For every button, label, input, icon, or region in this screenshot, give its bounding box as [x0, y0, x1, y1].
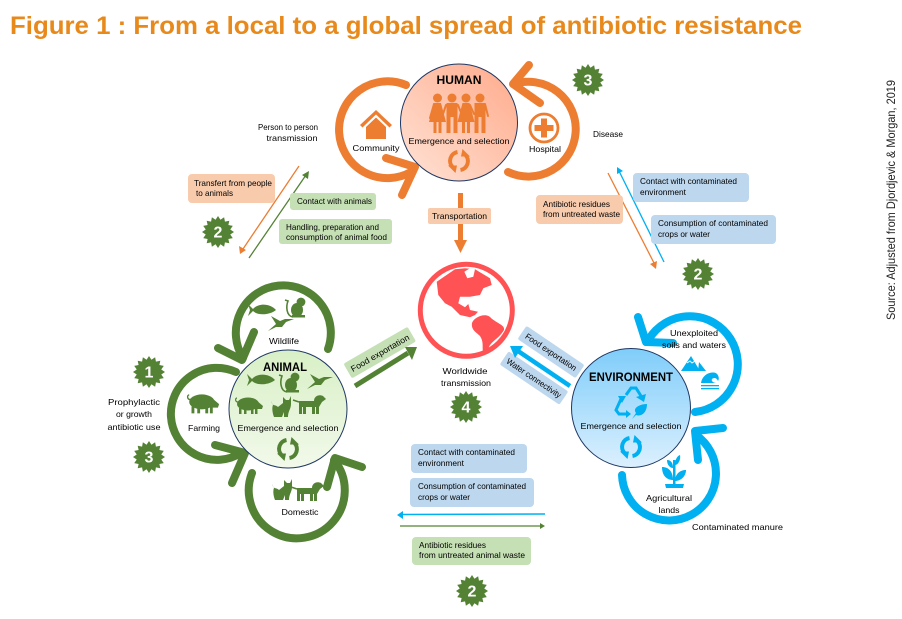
arrow: environment to human	[617, 167, 664, 262]
icon: cycle	[620, 435, 642, 459]
label: food exportation animal	[343, 327, 416, 378]
environment emergence label: Emergence and selection	[580, 421, 682, 431]
animal emergence label: Emergence and selection	[238, 423, 339, 433]
box: consumption	[651, 215, 776, 244]
box: antibiotic residues from waste	[536, 195, 623, 224]
icon: pig	[188, 394, 219, 413]
box: consumption: Consumption of contaminated	[658, 218, 768, 228]
box: consumption: crops or water	[658, 229, 710, 239]
arrow: domestic loop	[249, 458, 362, 538]
wildlife label: Wildlife	[269, 336, 299, 346]
person to person label: Person to person	[258, 122, 318, 132]
person to person label	[258, 122, 318, 143]
badge 3 animal: 3	[145, 450, 154, 466]
human emergence label: Emergence and selection	[408, 136, 510, 146]
box: contact with environment bottom: environment	[418, 458, 465, 468]
box: contact with environment: Contact with contaminated	[640, 176, 737, 186]
box: contact with environment	[633, 173, 749, 202]
label: food exportation animal: Food exportation	[349, 332, 411, 374]
badge 3 human: 3	[584, 72, 593, 90]
source note: Source: Adjusted from Djordjevic & Morgan, 2019	[884, 80, 898, 320]
community label: Community	[352, 143, 400, 153]
arrow: people to animals	[239, 166, 299, 254]
icon: mountain	[681, 356, 706, 371]
box: contact with animals: Contact with animals	[297, 196, 372, 206]
arrow: hospital loop	[508, 65, 576, 177]
arrow: food exportation animal	[355, 347, 417, 386]
environment heading: ENVIRONMENT	[589, 372, 673, 384]
arrow: food exportation environment	[510, 346, 570, 386]
box: antibiotic residues from waste: from untreated waste	[543, 209, 620, 219]
prophylactic use label: or growth	[116, 409, 152, 419]
prophylactic use label	[108, 397, 161, 432]
prophylactic use label: Prophylactic	[108, 397, 160, 407]
box: contact with environment bottom	[411, 444, 527, 473]
farming label: Farming	[188, 423, 220, 433]
icons: domestic	[272, 479, 324, 501]
icon: cycle	[277, 437, 299, 461]
icon: recycle leaf	[616, 388, 647, 419]
worldwide transmission label: transmission	[441, 378, 491, 388]
agricultural label: Agricultural	[646, 493, 692, 503]
human circle	[400, 64, 518, 181]
arrow: animal to environment	[400, 523, 545, 529]
panel: human	[339, 64, 576, 195]
box: transfer from people: to animals	[196, 188, 233, 198]
icons: wildlife	[248, 298, 305, 331]
agricultural label: lands	[658, 505, 680, 515]
animal circle	[229, 350, 347, 468]
arrow: unexploited loop	[638, 316, 738, 412]
arrow: transportation	[454, 193, 467, 253]
box: antibiotic residues animal waste: from untreated animal waste	[419, 550, 525, 560]
icon: house	[360, 110, 392, 139]
unexploited label: soils and waters	[662, 340, 726, 350]
human heading: HUMAN	[436, 75, 482, 87]
box: handling	[279, 219, 392, 244]
icon: cycle	[448, 149, 470, 173]
title: Figure 1 : From a local to a global spread of antibiotic resistance	[10, 12, 802, 40]
unexploited label: Unexploited	[670, 328, 718, 338]
domestic label: Domestic	[282, 507, 318, 517]
arrow: human to environment	[608, 173, 657, 269]
badge 1	[133, 356, 165, 388]
worldwide transmission label	[441, 366, 491, 388]
badge 2 right: 2	[694, 266, 703, 284]
arrow: animals to people	[249, 171, 309, 258]
worldwide transmission label: Worldwide	[442, 366, 488, 376]
badge 2 bottom	[456, 575, 488, 607]
animal heading: ANIMAL	[263, 362, 307, 374]
box: handling: Handling, preparation and	[286, 222, 379, 232]
disease label: Disease	[593, 129, 623, 139]
box: contact with environment bottom: Contact with contaminated	[418, 447, 515, 457]
box: transportation: Transportation	[432, 211, 487, 221]
badge 3 animal	[133, 441, 165, 473]
box: handling: consumption of animal food	[286, 232, 387, 242]
badge 2 left: 2	[214, 224, 223, 242]
box: consumption bottom	[410, 478, 534, 507]
label: water connectivity: Water connectivity	[505, 356, 564, 400]
icon: plant	[662, 455, 686, 488]
hospital label: Hospital	[529, 144, 561, 154]
icons: animals in circle	[236, 373, 333, 417]
badge 3 human	[572, 64, 604, 96]
arrow: environment to animal	[397, 511, 545, 519]
box: transfer from people	[188, 174, 275, 203]
box: antibiotic residues animal waste: Antibiotic residues	[419, 540, 486, 550]
icon: wave	[701, 372, 719, 389]
contaminated manure label: Contaminated manure	[692, 522, 783, 532]
box: antibiotic residues animal waste	[412, 537, 531, 565]
prophylactic use label: antibiotic use	[108, 422, 161, 432]
box: consumption bottom: crops or water	[418, 492, 470, 502]
box: transportation	[428, 208, 491, 224]
box: contact with environment: environment	[640, 187, 687, 197]
label: food exportation environment: Food exportation	[523, 331, 579, 373]
icon: globe	[420, 264, 512, 356]
panel: environment	[572, 316, 738, 520]
environment circle	[572, 348, 690, 468]
icon: hospital cross	[530, 114, 558, 142]
arrow: farming loop	[171, 368, 245, 483]
badge 4	[450, 391, 482, 423]
arrow: agricultural loop	[622, 428, 723, 520]
unexploited label	[662, 328, 726, 350]
badge 2 left	[202, 216, 234, 248]
person to person label: transmission	[266, 133, 318, 143]
badge 2 bottom: 2	[468, 584, 477, 600]
box: antibiotic residues from waste: Antibiotic residues	[543, 199, 610, 209]
box: transfer from people: Transfert from people	[194, 178, 272, 188]
panel: animal	[171, 285, 362, 538]
badge 2 right	[682, 258, 714, 290]
badge 4: 4	[462, 400, 471, 416]
box: consumption bottom: Consumption of contaminated	[418, 481, 526, 491]
box: contact with animals	[290, 193, 376, 210]
icon: people	[429, 94, 488, 133]
arrow: wildlife loop	[218, 285, 331, 360]
agricultural label	[646, 493, 692, 515]
arrow: community loop	[339, 81, 415, 195]
badge 1: 1	[145, 364, 154, 382]
